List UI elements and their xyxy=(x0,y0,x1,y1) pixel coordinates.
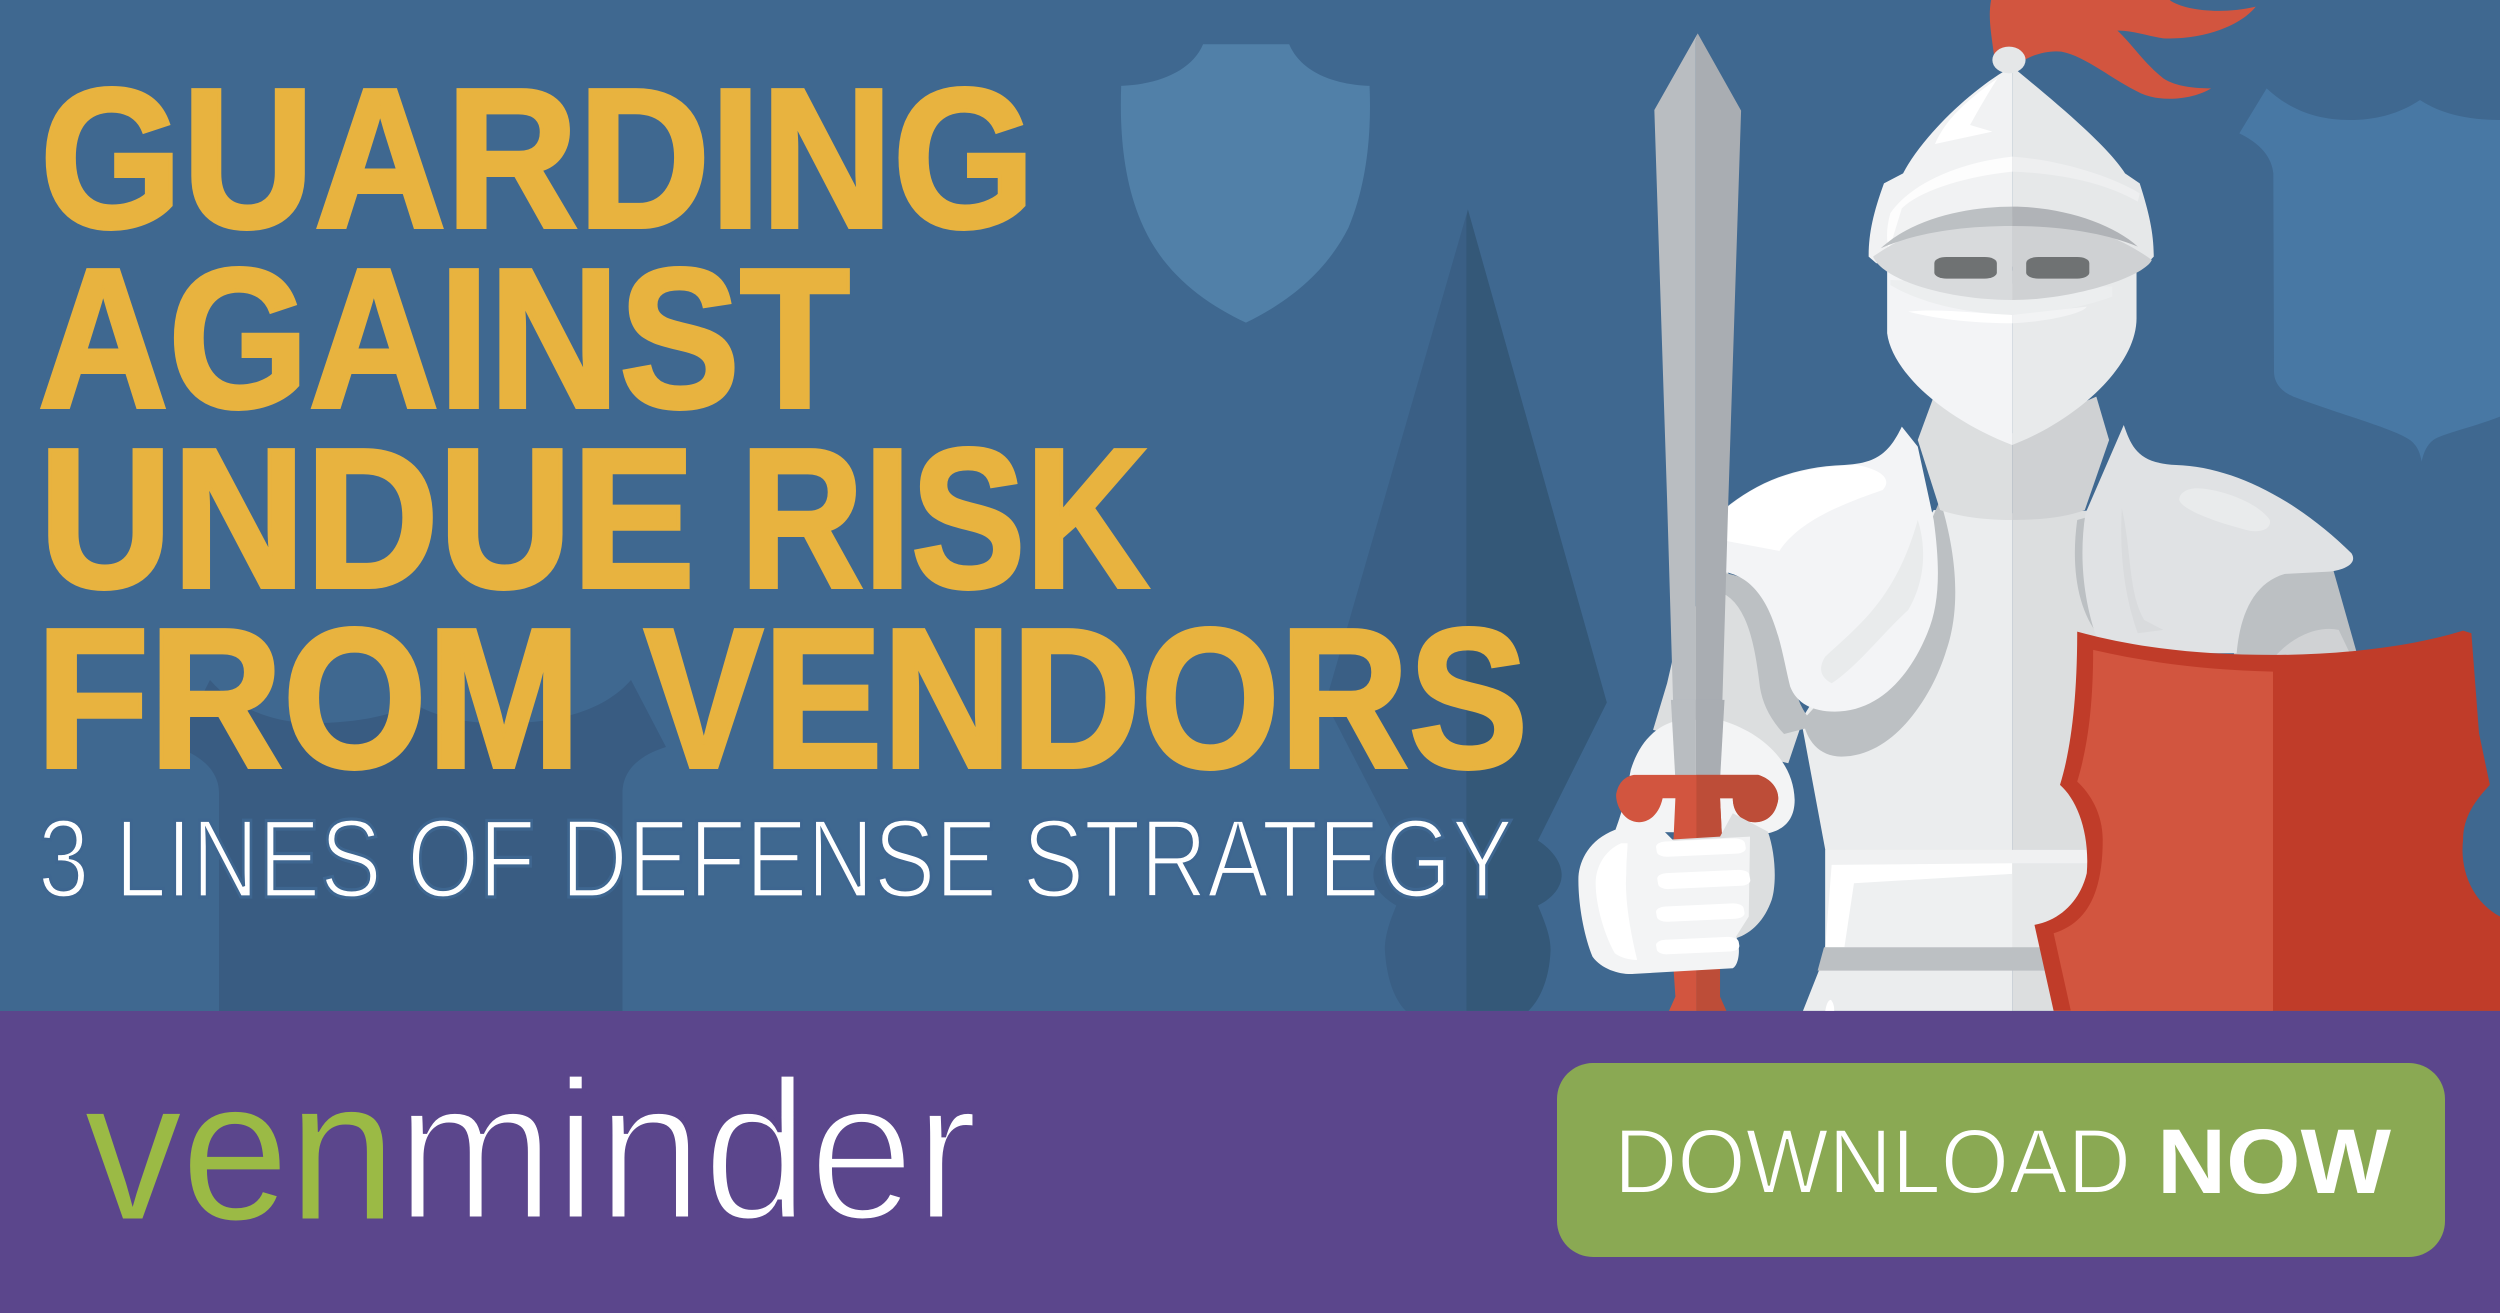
button label: DOWNLOAD xyxy=(1614,1111,2131,1213)
crossguard and grip xyxy=(1616,775,1778,840)
eye slots xyxy=(1934,257,2089,279)
button: download now xyxy=(1557,1063,2445,1257)
re-drawn blade over cuff xyxy=(1671,700,1725,780)
neck xyxy=(1918,397,2109,520)
button label: NOW xyxy=(2157,1111,2391,1213)
helmet dome xyxy=(1869,67,2154,267)
sword blade xyxy=(1654,33,1741,780)
torso xyxy=(1801,510,2106,1011)
right arm xyxy=(2233,567,2358,657)
background: centre shield xyxy=(1121,44,1370,323)
title line 4 xyxy=(36,588,1528,810)
title line 4: FROM xyxy=(36,588,581,810)
face guard xyxy=(1887,271,2137,445)
left pauldron xyxy=(1723,427,1938,712)
background: right shield xyxy=(2239,88,2500,462)
sword pommel end xyxy=(1669,968,1726,1011)
helmet knob xyxy=(1992,47,2026,73)
gloved hand xyxy=(1578,813,1775,974)
title xyxy=(36,48,1528,810)
title line 1: GUARDING xyxy=(40,48,1035,270)
title line 4: VENDORS xyxy=(644,588,1528,810)
subtitle: 3 LINES OF DEFENSE STRATEGY xyxy=(38,797,1513,921)
visor xyxy=(1873,207,2152,300)
knight illustration xyxy=(1578,0,2500,1011)
red plume xyxy=(1990,0,2256,99)
title line 3 xyxy=(39,408,1149,630)
title line 2: AGAINST xyxy=(38,228,850,450)
bottom band xyxy=(0,1011,2500,1313)
gauntlet cuff xyxy=(1615,720,1795,833)
shield xyxy=(2034,631,2500,1011)
button label xyxy=(1614,1111,2391,1213)
logo part: ven: ven xyxy=(85,1039,396,1262)
logo: venminder xyxy=(85,1039,978,1262)
background: castle tower xyxy=(176,680,666,1011)
left arm xyxy=(1653,563,1803,763)
logo part: minder: minder xyxy=(396,1039,978,1262)
shoulder shadow xyxy=(1803,500,1955,757)
background: castle spire xyxy=(1326,209,1607,1011)
right pauldron xyxy=(2075,425,2353,653)
title line 3: UNDUE xyxy=(39,408,695,630)
title line 3: RISK xyxy=(740,408,1149,630)
